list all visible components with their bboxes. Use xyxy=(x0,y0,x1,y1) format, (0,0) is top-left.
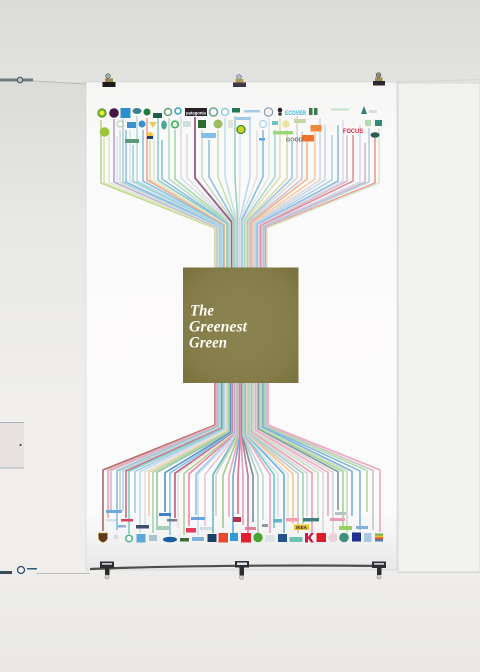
top logos row xyxy=(98,106,382,144)
label: teal tag xyxy=(273,519,282,522)
heading: The Greenest Green xyxy=(189,302,248,352)
logo: blue emblem xyxy=(127,122,136,128)
logo: red square two xyxy=(316,533,326,542)
label: blue tag xyxy=(118,525,126,528)
left wall panel xyxy=(0,82,86,572)
logo: yellow-green circle xyxy=(98,109,106,117)
logo: pale blue ring two xyxy=(260,120,266,128)
poster sheet xyxy=(86,82,397,570)
logo: red K xyxy=(305,533,314,542)
logo: yellow circle xyxy=(282,120,290,128)
logo: blue square xyxy=(120,108,130,118)
logo: navy square xyxy=(278,534,287,542)
logo: navy ring xyxy=(264,108,273,116)
logo: blue strip left xyxy=(201,133,216,138)
logo: pale green ring xyxy=(117,121,123,127)
logo: green letters xyxy=(365,120,371,126)
logo: dark green pair xyxy=(309,108,318,115)
label: pale blue xyxy=(106,519,116,522)
label: red tag xyxy=(121,519,133,522)
logo: blue wordmark xyxy=(244,110,260,112)
label: red mark xyxy=(186,528,196,532)
logo: pale pink circle xyxy=(328,533,338,542)
logo: pale blue ring xyxy=(222,108,228,116)
label: blue tag two xyxy=(356,526,368,529)
label: grey tag xyxy=(262,524,268,527)
logo: pale blue crest xyxy=(364,533,372,542)
logo: teal tree xyxy=(361,106,367,114)
logo: blue circle xyxy=(138,120,146,128)
logo: green recycle xyxy=(172,121,178,128)
label: pale grey xyxy=(200,527,212,530)
binder clip top center xyxy=(233,75,246,87)
logo: pale blue mark xyxy=(114,534,118,540)
logo: green blue ring xyxy=(126,535,132,542)
logo: green circle xyxy=(253,533,263,542)
panel: olive square xyxy=(183,268,298,383)
binder clip top right xyxy=(373,73,385,86)
logo: green circle xyxy=(144,108,150,116)
logo: teal bar xyxy=(290,537,302,542)
heading: The Greenest Green: The xyxy=(190,302,214,320)
logo: orange red rectangle xyxy=(310,125,322,132)
label: dark teal tag xyxy=(303,518,319,522)
logo: teal ring xyxy=(175,108,181,114)
logo: dark green badge xyxy=(153,113,162,118)
label: green tag two xyxy=(339,526,352,530)
title panel xyxy=(183,268,298,383)
logo: blue cross mark xyxy=(192,537,204,541)
logo: red orange square xyxy=(218,533,228,542)
logo: teal oval xyxy=(132,108,142,114)
logo: blue text strip xyxy=(236,117,250,120)
logo: purple circle xyxy=(109,108,119,118)
logo: dark green mark xyxy=(180,538,189,542)
logo: olive wordmark xyxy=(294,119,306,123)
logo: dark green square xyxy=(198,120,206,128)
logo: ford oval xyxy=(163,537,177,542)
logo: pale tower xyxy=(183,121,191,127)
logo: apple stripes xyxy=(375,534,383,542)
logo: pale text marks xyxy=(331,108,349,111)
logo: pale grey mark xyxy=(228,120,233,128)
top connecting lines xyxy=(101,116,379,270)
binder clip bottom right xyxy=(372,562,386,579)
bottom logos row xyxy=(98,510,383,542)
label: green tag xyxy=(156,526,170,530)
logo: dark teal square xyxy=(375,120,382,126)
logo: green strip xyxy=(273,131,293,134)
logo: panda xyxy=(277,108,283,116)
logo: teal figure xyxy=(272,121,278,125)
logo: patagonia: patagonia xyxy=(186,110,207,116)
right wall panel xyxy=(398,83,480,572)
label: pink wordmark xyxy=(286,518,299,522)
label: dark mark xyxy=(167,519,177,522)
label: grey caption xyxy=(335,512,346,515)
binder clip top left xyxy=(102,74,116,87)
logo: green ring xyxy=(164,108,172,116)
binder clip bottom left xyxy=(100,562,114,579)
logo: yellow navy sun xyxy=(147,132,153,139)
label: pink tag two xyxy=(330,518,345,521)
logo: grey GOOD: GOOD xyxy=(286,138,303,144)
logo: yellow triangle xyxy=(149,122,157,128)
logo: lime circle xyxy=(100,127,109,137)
logo: blue U xyxy=(230,533,238,541)
logo: navy N xyxy=(208,534,216,542)
logo: green circle mark xyxy=(214,120,222,128)
logo: green ring two xyxy=(210,108,218,116)
logo: pale label xyxy=(265,535,275,542)
label: blue philips xyxy=(191,517,205,520)
logo: patagonia xyxy=(185,108,207,116)
heading: The Greenest Green: Greenest xyxy=(189,318,248,336)
label: IKEA xyxy=(294,524,309,530)
bottom wire and connector xyxy=(0,566,480,574)
top hanging wire and connector xyxy=(0,77,480,84)
bottom connecting lines xyxy=(103,380,380,535)
label: dark bar xyxy=(136,525,149,528)
logo: UPS shield xyxy=(98,533,108,542)
label: IKEA: IKEA xyxy=(296,525,308,530)
logo: dark oval xyxy=(370,132,380,138)
label: red stripes xyxy=(233,517,241,522)
logo: red coca-cola xyxy=(241,533,251,542)
heading: The Greenest Green: Green xyxy=(189,334,227,352)
logo: grey wordmark xyxy=(369,110,377,113)
label: blue strip xyxy=(106,510,122,513)
logo: teal circle xyxy=(339,533,349,542)
logo: ecover: ECOVER xyxy=(285,110,306,117)
binder clip bottom center xyxy=(235,561,249,580)
logo: navy square two xyxy=(352,532,361,542)
logo: green yellow circle xyxy=(237,126,245,134)
logo: teal leaf xyxy=(161,120,167,130)
label: pink tag xyxy=(245,527,256,530)
logo: teal emblem xyxy=(149,535,157,541)
logo: orange rectangle xyxy=(302,135,314,142)
logo: blue mark xyxy=(259,138,265,140)
logo: dark green tag xyxy=(232,108,240,112)
logo: green crest xyxy=(125,139,139,143)
logo: FOCUS: FOCUS xyxy=(343,128,364,135)
label: blue wordmark xyxy=(159,513,171,516)
wall switch plate xyxy=(0,422,24,468)
logo: blue square xyxy=(136,534,146,542)
